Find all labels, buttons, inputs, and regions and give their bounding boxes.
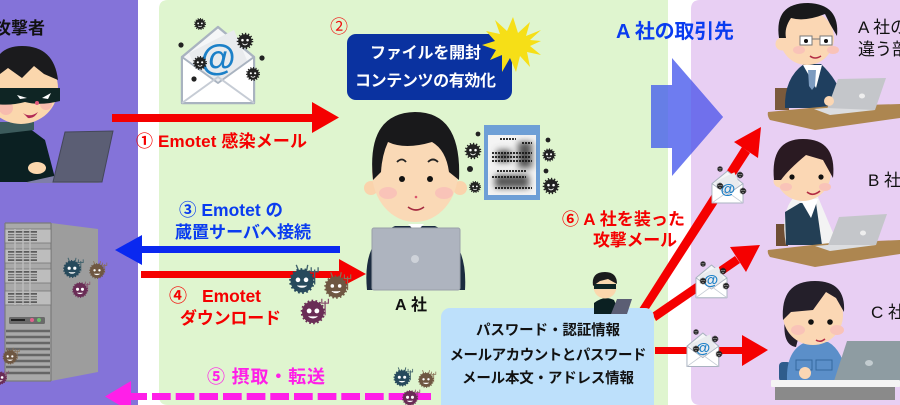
panel: stolen information: パスワード・認証情報 bbox=[476, 321, 620, 339]
panel: attacker bbox=[0, 0, 138, 405]
label 3 bbox=[175, 200, 311, 242]
illustration: company A employee bbox=[364, 112, 467, 290]
label 5: ⑤ 摂取・転送 bbox=[207, 367, 325, 387]
label 4: Emotet bbox=[202, 286, 261, 306]
callout: open file, enable content: ファイルを開封 bbox=[370, 44, 481, 62]
icon: attack mail envelope 1 bbox=[712, 167, 746, 203]
arrow 3: connect to server bbox=[115, 235, 340, 265]
arrow 4: download bbox=[141, 259, 366, 288]
label 6 bbox=[562, 210, 685, 250]
panel: company A bbox=[159, 0, 668, 405]
icon: attack mail envelope 2: @ bbox=[704, 272, 718, 289]
label 1: ① Emotet 感染メール bbox=[136, 131, 307, 151]
illustration: server bbox=[5, 223, 98, 381]
icon: attack mail envelope 2 bbox=[696, 262, 729, 298]
label 3: ③ Emotet の bbox=[179, 200, 283, 220]
illustration: small attacker bbox=[593, 272, 632, 314]
label 4 bbox=[169, 286, 281, 328]
arrow: attack mail to company B bbox=[652, 245, 760, 321]
label 3: 蔵置サーバへ接続 bbox=[175, 223, 311, 242]
panel: business partners bbox=[691, 0, 900, 405]
arrow 5: exfiltration bbox=[105, 381, 431, 405]
label 6: ⑥ A 社を装った bbox=[562, 210, 685, 229]
illustration: woman at desk, company B bbox=[768, 139, 900, 267]
panel: stolen information bbox=[441, 308, 654, 405]
step 2 number: ② bbox=[330, 17, 348, 37]
panel: stolen information: メールアカウントとパスワード bbox=[450, 347, 646, 364]
icon: attack mail envelope 3: @ bbox=[696, 340, 710, 357]
label 6: 攻撃メール bbox=[593, 230, 677, 250]
arrow: attack mail to A-company other department bbox=[639, 127, 761, 312]
icon: yellow burst bbox=[482, 17, 541, 72]
icon: infected email envelope: @ bbox=[200, 37, 236, 78]
icon: attack mail envelope 3 bbox=[687, 330, 722, 366]
illustration: attacker at laptop bbox=[0, 46, 113, 183]
callout: open file, enable content bbox=[347, 34, 512, 100]
icon: viruses exfiltrating bbox=[394, 367, 436, 405]
label 4: ④ bbox=[169, 286, 187, 306]
icon: attack mail envelope 1: @ bbox=[721, 181, 735, 198]
arrow: attack mail to company C bbox=[655, 335, 768, 366]
icon: viruses on server bbox=[0, 258, 107, 384]
illustration: infected document with viruses bbox=[466, 125, 558, 200]
icon: infected email envelope bbox=[178, 19, 265, 103]
heading: business partners: A 社の取引先 bbox=[616, 20, 734, 43]
label 4: ダウンロード bbox=[180, 308, 281, 328]
label: company A: A 社 bbox=[395, 296, 427, 314]
illustration: woman at desk, company C bbox=[771, 281, 900, 400]
icon: Emotet viruses downloaded bbox=[290, 265, 351, 323]
arrow: attack spreads to partners bbox=[651, 58, 723, 176]
illustration: man at desk, other department bbox=[768, 3, 900, 130]
callout: open file, enable content: コンテンツの有効化 bbox=[355, 72, 496, 90]
panel: stolen information: メール本文・アドレス情報 bbox=[462, 369, 634, 387]
arrow 1: infection mail bbox=[112, 102, 339, 133]
label: A company other department bbox=[858, 18, 900, 59]
